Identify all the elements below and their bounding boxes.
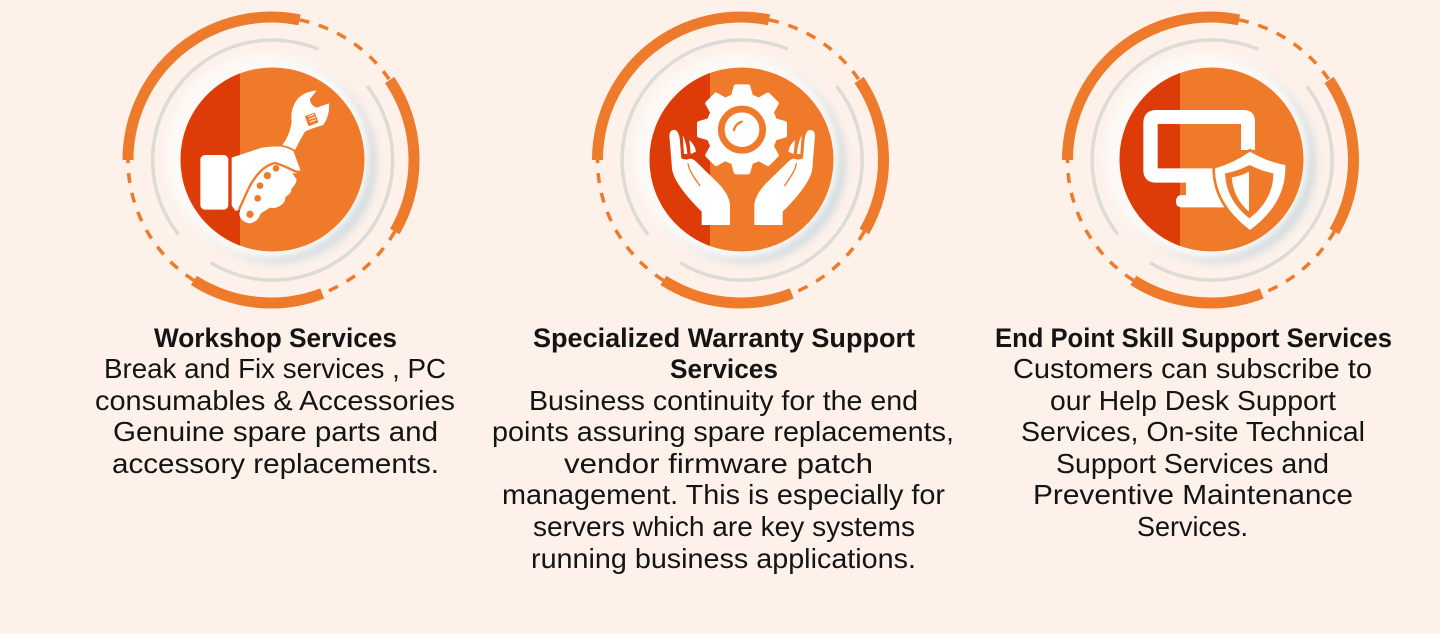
text: workshop services xyxy=(95,323,455,479)
right hand xyxy=(754,130,815,225)
panel: specialized warranty support services xyxy=(492,17,954,574)
orange disc xyxy=(165,54,377,263)
text: end point skill support services: End Point Skill Support Services xyxy=(995,323,1392,353)
text: end point skill support services: our Help Desk Support xyxy=(1050,385,1336,416)
icon: hand holding wrench xyxy=(200,91,329,223)
text: specialized warranty support services: management. This is especially for xyxy=(502,479,945,510)
text: end point skill support services: Support Services and xyxy=(1056,448,1329,479)
text: specialized warranty support services: Specialized Warranty Support xyxy=(533,323,915,353)
outer and inner rings xyxy=(128,17,414,303)
outer and inner rings xyxy=(598,17,884,303)
icon: monitor with shield xyxy=(1143,110,1285,230)
text: specialized warranty support services: running business applications. xyxy=(531,543,916,574)
text: workshop services: Genuine spare parts and xyxy=(113,416,438,447)
outer and inner rings xyxy=(1068,17,1354,303)
orange disc xyxy=(634,54,846,263)
text: specialized warranty support services: Services xyxy=(670,354,778,384)
text: specialized warranty support services: vendor firmware patch xyxy=(564,448,873,479)
text: specialized warranty support services: servers which are key systems xyxy=(533,511,915,542)
text: end point skill support services: Preventive Maintenance xyxy=(1033,479,1353,510)
text: workshop services: Break and Fix services , PC xyxy=(104,353,446,384)
text: specialized warranty support services xyxy=(492,323,954,574)
panel: workshop services xyxy=(95,17,455,479)
text: end point skill support services: Services, On-site Technical xyxy=(1021,416,1365,447)
text: workshop services: accessory replacements. xyxy=(112,448,439,479)
orange disc xyxy=(1104,54,1316,263)
text: workshop services: Workshop Services xyxy=(154,323,397,353)
text: specialized warranty support services: points assuring spare replacements, xyxy=(492,416,954,447)
text: end point skill support services: Customers can subscribe to xyxy=(1013,353,1372,384)
text: end point skill support services: Services. xyxy=(1137,511,1248,542)
text: workshop services: consumables & Accessories xyxy=(95,385,455,416)
left hand xyxy=(669,130,730,225)
text: end point skill support services xyxy=(995,323,1392,542)
text: specialized warranty support services: Business continuity for the end xyxy=(529,385,918,416)
icon: hands holding gear xyxy=(669,87,815,225)
panel: end point skill support services xyxy=(995,17,1392,542)
